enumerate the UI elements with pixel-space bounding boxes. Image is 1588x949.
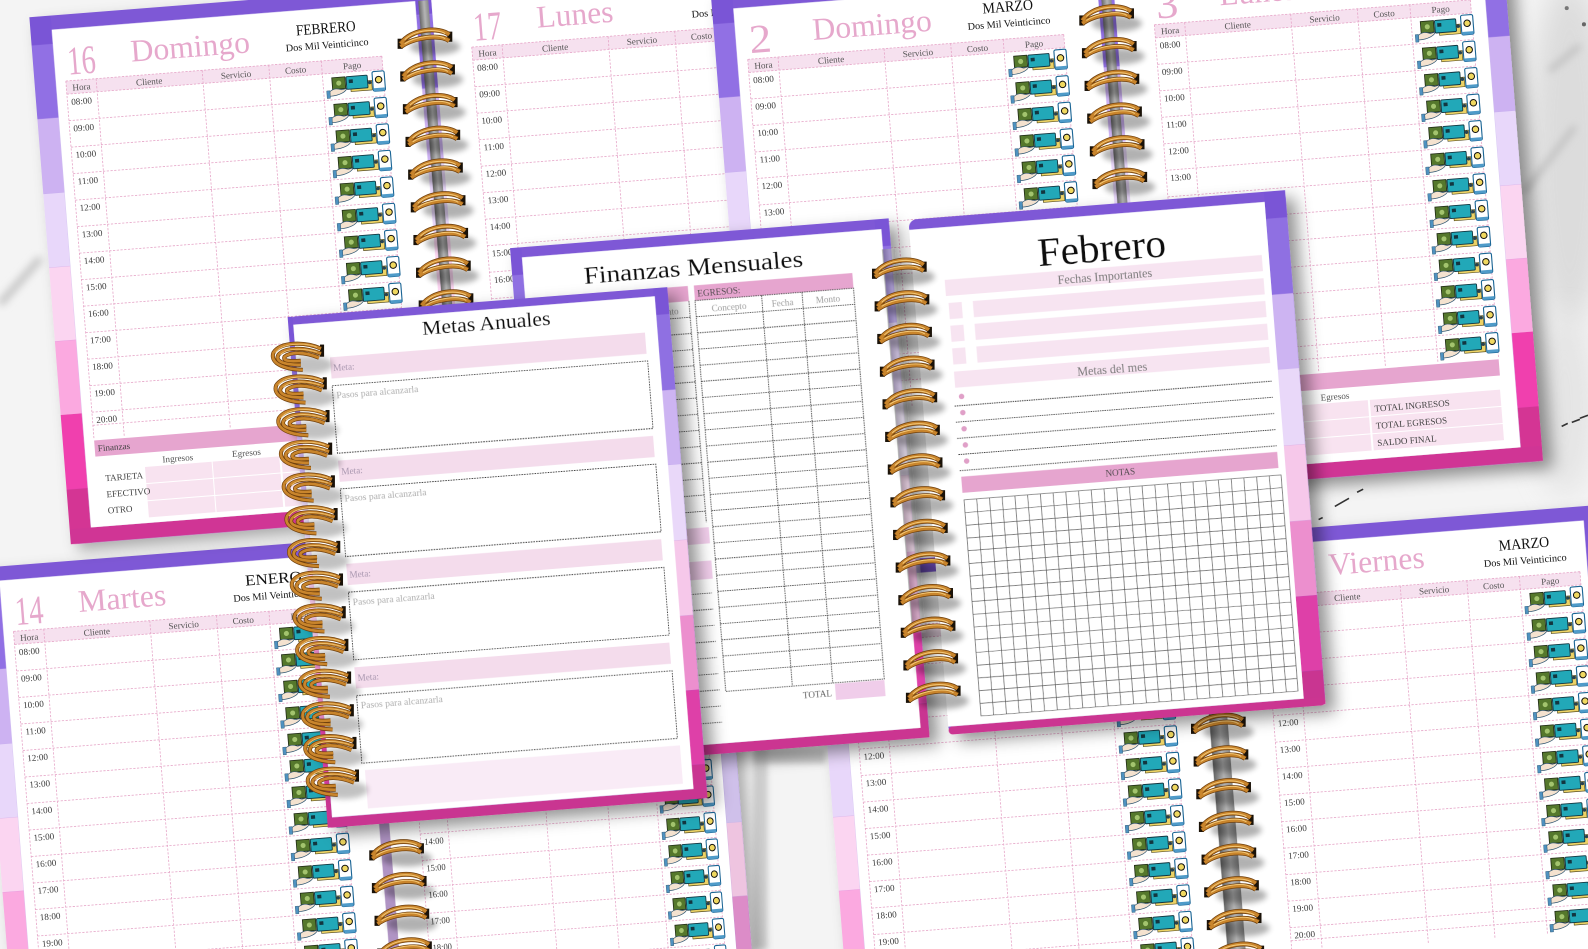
rings: Finanzas binding bbox=[872, 260, 969, 709]
table: 16 Domingo: Finanzas bbox=[97, 441, 131, 453]
goal block 4 bbox=[354, 642, 677, 763]
table: 14 Martes: 14:00 bbox=[31, 805, 53, 816]
table: 3 Lunes: Hora bbox=[1161, 25, 1180, 36]
table: 16 Domingo: OTRO bbox=[107, 504, 133, 516]
table: 16 Domingo: 15:00 bbox=[86, 281, 107, 292]
table: left page of bottom right notebook bbox=[850, 605, 1195, 949]
table: 14 Martes: Dos Mil Veinticinco bbox=[233, 587, 317, 605]
title: Metas Anuales: Metas Anuales bbox=[421, 308, 551, 340]
table: 14 Martes: 12:00 bbox=[27, 752, 49, 763]
table: 2 Domingo: 08:00 bbox=[753, 74, 775, 85]
table: 17 Lunes: 14:00 bbox=[489, 220, 511, 232]
table: left page of bottom right notebook: 14:00 bbox=[867, 803, 889, 815]
table: 16 Domingo: Dos Mil Veinticinco bbox=[285, 37, 369, 55]
table: 14 Martes: Pago bbox=[290, 610, 310, 622]
table: 16 Domingo: 16:00 bbox=[88, 307, 110, 319]
table: 16 Domingo: EFECTIVO bbox=[106, 486, 151, 499]
table: 14 Martes: 16:00 bbox=[35, 858, 57, 869]
table: 16 Domingo: Cliente bbox=[136, 76, 163, 88]
table: 2 Domingo: Servicio bbox=[902, 47, 934, 59]
goal block 1: Meta: bbox=[333, 362, 355, 373]
goal block 3: Pasos para alcanzarla bbox=[352, 591, 436, 608]
section: notas grid: NOTAS bbox=[1105, 466, 1135, 479]
table: 16 Domingo: 20:00 bbox=[96, 413, 118, 425]
table: 16 Domingo: 11:00 bbox=[77, 175, 99, 186]
table: 3 Lunes: Cliente bbox=[1224, 19, 1251, 31]
table: 17 Lunes: Costo bbox=[690, 30, 713, 42]
table: 14 Martes: 19:00 bbox=[41, 937, 63, 949]
table: 2 Domingo: Domingo bbox=[811, 3, 933, 47]
table: 3 Lunes: 12:00 bbox=[1168, 145, 1190, 157]
table: 3 Lunes: 11:00 bbox=[1166, 119, 1187, 130]
table: Viernes: 20:00 bbox=[1294, 929, 1316, 940]
table: 16 Domingo: Domingo bbox=[129, 24, 251, 69]
panel: Finanzas Mensuales bbox=[510, 218, 934, 767]
table: 2 Domingo: Hora bbox=[754, 60, 773, 71]
table: 14 Martes bbox=[10, 564, 359, 949]
table: Viernes: 14:00 bbox=[1282, 770, 1303, 781]
table: ingresos: Monto bbox=[654, 306, 679, 318]
spread: 2 Domingo top right notebook bbox=[711, 0, 1543, 523]
goal block 2 bbox=[338, 436, 661, 557]
table: 3 Lunes: 13:00 bbox=[1170, 172, 1192, 183]
table: Viernes: 12:00 bbox=[1277, 717, 1299, 728]
table: left page of bottom right notebook: 16:00 bbox=[871, 856, 893, 868]
table: Viernes: Cliente bbox=[1334, 591, 1361, 603]
table: 16 Domingo: TARJETA bbox=[105, 470, 144, 483]
title: Finanzas Mensuales: Finanzas Mensuales bbox=[583, 246, 804, 290]
table: 14 Martes: 18:00 bbox=[39, 911, 61, 922]
table: 14 Martes: 13:00 bbox=[29, 778, 51, 790]
table: 17 Lunes: 15:00 bbox=[491, 247, 513, 259]
table: 17 Lunes: 11:00 bbox=[483, 141, 505, 153]
table: 17 Lunes: 13:00 bbox=[487, 194, 509, 206]
table: 17 Lunes: 12:00 bbox=[485, 167, 507, 179]
table: 14 Martes: 17:00 bbox=[37, 884, 59, 896]
table: left page of bottom right notebook: 17:00 bbox=[874, 883, 895, 894]
table: 2 Domingo: 13:00 bbox=[763, 206, 785, 218]
panel: Febrero bbox=[908, 190, 1326, 735]
table: 16 Domingo: Servicio bbox=[220, 69, 252, 81]
table: 14 Martes: 08:00 bbox=[19, 646, 40, 657]
table: Viernes bbox=[1260, 528, 1588, 949]
table: 14 Martes: 10:00 bbox=[23, 699, 45, 710]
table: 2 Domingo: Pago bbox=[1025, 38, 1044, 50]
table: ingresos: Concepto bbox=[544, 314, 580, 327]
table: 14 Martes: Cliente bbox=[83, 626, 110, 638]
table: 16 Domingo: 09:00 bbox=[73, 122, 95, 133]
table: 16 Domingo: FEBRERO bbox=[295, 18, 356, 39]
table: 14 Martes: 15:00 bbox=[33, 831, 55, 843]
table: 17 Lunes: Servicio bbox=[626, 35, 658, 47]
spread: 16 Domingo top left notebook bbox=[29, 0, 861, 544]
rings: bottom left notebook bbox=[369, 842, 440, 949]
table: 14 Martes: Costo bbox=[232, 615, 255, 626]
goal block 2: Pasos para alcanzarla bbox=[344, 487, 428, 505]
table: 14 Martes: 11:00 bbox=[25, 725, 47, 737]
table: left page of bottom right notebook: 18:00 bbox=[876, 909, 898, 921]
table: right page of bottom left notebook bbox=[407, 639, 730, 949]
table: 17 Lunes bbox=[468, 0, 817, 405]
table: left page of bottom right notebook: 15:00 bbox=[869, 830, 891, 841]
gap between centre panels bbox=[877, 476, 962, 556]
table: Viernes: 15:00 bbox=[1284, 796, 1306, 808]
table: 14 Martes: Martes bbox=[77, 577, 167, 619]
table: 16 Domingo: Ingresos bbox=[162, 452, 194, 465]
section: Fechas Importantes: Fechas Importantes bbox=[1057, 266, 1153, 287]
table: Viernes: Pago bbox=[1541, 575, 1560, 587]
table: 3 Lunes: Costo bbox=[1373, 8, 1396, 20]
goal block 3 bbox=[346, 539, 669, 660]
table: 16 Domingo: Pago bbox=[343, 60, 362, 71]
table: 14 Martes: Hora bbox=[20, 632, 39, 643]
table: right page of bottom left notebook: 14:00 bbox=[424, 835, 445, 847]
table: 2 Domingo: 2 bbox=[747, 15, 773, 62]
table: 16 Domingo: 17:00 bbox=[90, 334, 112, 345]
table: right page of bottom left notebook: 17:00 bbox=[430, 915, 451, 926]
table: Viernes: MARZO bbox=[1498, 534, 1550, 555]
table: 2 Domingo: Dos Mil Veinticinco bbox=[967, 15, 1051, 33]
table: 3 Lunes: Egresos bbox=[1320, 390, 1350, 403]
table: left page of bottom right notebook: 13:00 bbox=[865, 777, 887, 788]
table: 16 Domingo: 18:00 bbox=[92, 360, 114, 372]
table: 14 Martes: ENERO bbox=[245, 568, 302, 590]
table: 16 Domingo: 12:00 bbox=[79, 201, 101, 213]
table: left page of bottom right notebook: 19:00 bbox=[878, 936, 900, 947]
table: 2 Domingo: Cliente bbox=[818, 54, 845, 66]
table: 3 Lunes: 10:00 bbox=[1164, 92, 1185, 104]
table: Viernes: 17:00 bbox=[1288, 849, 1310, 861]
rings: bottom right notebook bbox=[1191, 715, 1272, 949]
table: 14 Martes: 09:00 bbox=[21, 672, 43, 684]
section: Metas del mes: Metas del mes bbox=[1077, 360, 1148, 379]
table: 3 Lunes: TOTAL EGRESOS bbox=[1375, 415, 1447, 431]
table: Viernes: Costo bbox=[1483, 580, 1505, 591]
goal block 3: Meta: bbox=[349, 568, 371, 580]
spread: Viernes bottom right notebook bbox=[813, 505, 1588, 949]
table: 17 Lunes: 17 bbox=[471, 3, 503, 50]
goal block 2: Meta: bbox=[341, 465, 363, 477]
table: ingresos: INGRESOS: bbox=[531, 298, 579, 311]
table: 2 Domingo: 09:00 bbox=[755, 100, 777, 112]
table: egresos: Monto bbox=[815, 293, 841, 305]
table: 3 Lunes: 08:00 bbox=[1159, 39, 1181, 51]
table: Viernes: 13:00 bbox=[1279, 743, 1301, 755]
spread: 14 Martes bottom left notebook bbox=[0, 510, 760, 949]
table: left page of bottom right notebook: 12:00 bbox=[863, 750, 885, 762]
table: 2 Domingo: 10:00 bbox=[757, 127, 779, 138]
table: Viernes: Dos Mil Veinticinco bbox=[1483, 553, 1567, 570]
panel: Metas Anuales bbox=[288, 287, 707, 828]
table: 2 Domingo: 12:00 bbox=[761, 180, 783, 191]
table: 16 Domingo: 14:00 bbox=[83, 254, 105, 266]
table: 16 Domingo bbox=[63, 14, 417, 521]
table: 16 Domingo: Costo bbox=[285, 64, 307, 76]
table: 3 Lunes: SALDO FINAL bbox=[1377, 433, 1437, 448]
rings: Metas Anuales coil binding bbox=[273, 344, 368, 799]
table: 17 Lunes: 08:00 bbox=[477, 61, 499, 73]
table: 17 Lunes: Cliente bbox=[542, 42, 569, 54]
table: Viernes: 18:00 bbox=[1290, 876, 1312, 887]
table: Viernes: 16:00 bbox=[1286, 823, 1308, 834]
table: right page of bottom left notebook: 15:00 bbox=[426, 862, 447, 873]
table: 17 Lunes: 10:00 bbox=[481, 114, 503, 126]
goal block 1: Pasos para alcanzarla bbox=[336, 384, 420, 401]
table: ingresos bbox=[528, 286, 724, 735]
table: Viernes: Viernes bbox=[1327, 540, 1426, 582]
table: 16 Domingo: 19:00 bbox=[94, 387, 116, 399]
table: 16 Domingo: 08:00 bbox=[71, 95, 93, 107]
binding shadow bbox=[882, 248, 925, 633]
goal block 1 bbox=[330, 333, 653, 453]
table: egresos: EGRESOS: bbox=[697, 285, 741, 298]
table: 17 Lunes: Hora bbox=[478, 47, 497, 59]
table: 17 Lunes: 09:00 bbox=[479, 88, 501, 100]
goal block 4: Pasos para alcanzarla bbox=[360, 694, 444, 711]
title: Febrero: Febrero bbox=[1036, 220, 1168, 275]
table: 14 Martes: Servicio bbox=[168, 619, 200, 631]
table: 3 Lunes: Pago bbox=[1431, 4, 1451, 15]
table: 3 Lunes: TOTAL INGRESOS bbox=[1374, 398, 1450, 414]
table: right page of bottom left notebook: 16:00 bbox=[428, 888, 449, 900]
section: Fechas Importantes bbox=[945, 255, 1268, 365]
goal block 4: Meta: bbox=[357, 672, 379, 683]
table: 3 Lunes: 09:00 bbox=[1161, 66, 1183, 77]
table: ingresos: Fecha bbox=[616, 309, 638, 321]
table: 16 Domingo: Egresos bbox=[232, 447, 262, 459]
table: 17 Lunes: Dos Mil Veinticinco bbox=[691, 3, 775, 21]
section: Metas del mes bbox=[952, 347, 1277, 471]
table: 17 Lunes: 16:00 bbox=[493, 273, 515, 285]
table: 16 Domingo: 13:00 bbox=[81, 228, 103, 239]
table: 16 Domingo: Hora bbox=[72, 81, 91, 93]
section: notas grid bbox=[961, 452, 1298, 716]
table: 14 Martes: 14 bbox=[13, 587, 45, 634]
table: 16 Domingo: 16 bbox=[66, 37, 97, 84]
table: 3 Lunes bbox=[1151, 0, 1506, 465]
table: 2 Domingo: 11:00 bbox=[759, 153, 781, 165]
footer band bbox=[365, 745, 683, 808]
table: egresos bbox=[694, 273, 886, 709]
table: Viernes: Servicio bbox=[1419, 584, 1450, 596]
rings: top left notebook bbox=[398, 30, 481, 317]
table: 3 Lunes: Servicio bbox=[1309, 12, 1340, 25]
table: 16 Domingo: 10:00 bbox=[75, 148, 97, 160]
table: egresos: Concepto bbox=[711, 301, 747, 313]
table: 2 Domingo: Costo bbox=[966, 43, 989, 54]
rings: top right notebook bbox=[1079, 7, 1155, 195]
table: egresos: Fecha bbox=[771, 297, 794, 309]
table: egresos: TOTAL bbox=[803, 688, 833, 700]
table: Viernes: 19:00 bbox=[1292, 902, 1314, 914]
table: 2 Domingo bbox=[744, 0, 1093, 417]
